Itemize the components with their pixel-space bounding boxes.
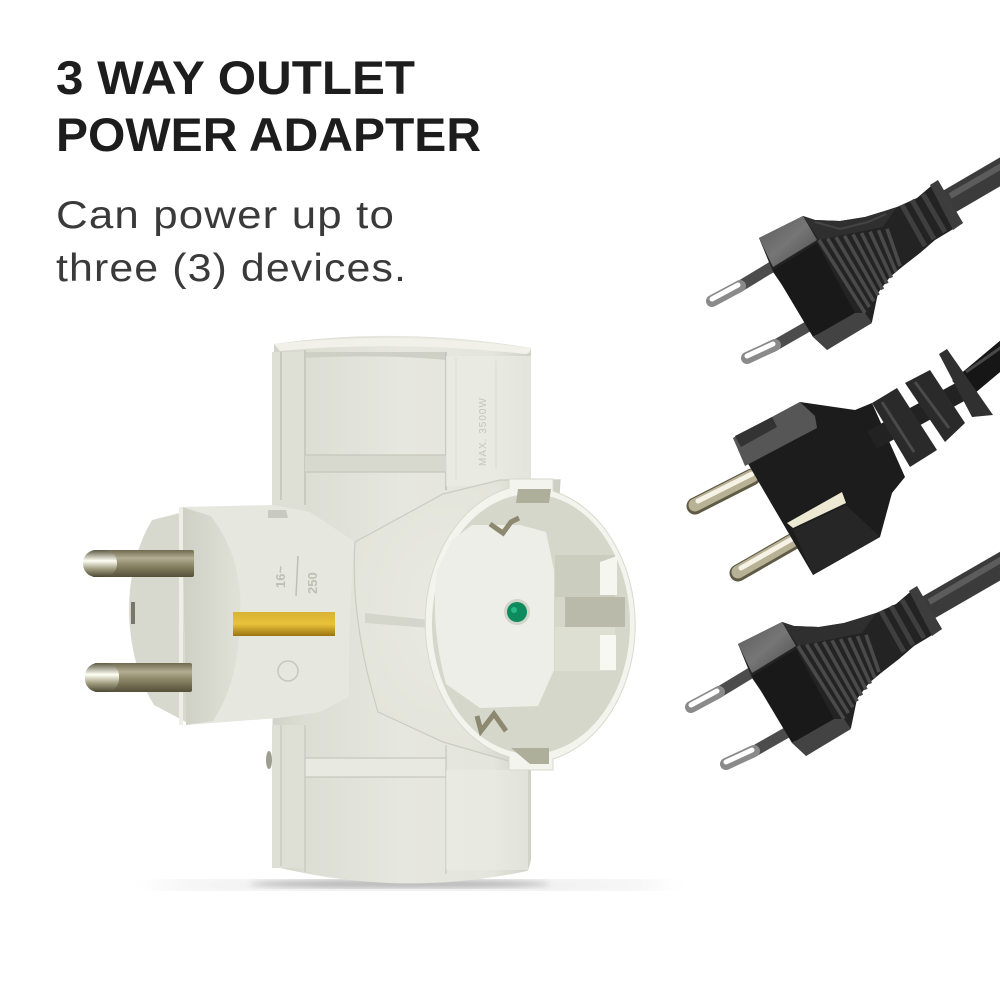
subtitle text: Can power up to [56, 194, 395, 237]
right socket [354, 479, 635, 770]
cord [945, 164, 1000, 204]
title: 3 WAY OUTLET [56, 51, 415, 104]
pins [695, 474, 792, 573]
socket notches [516, 489, 551, 503]
3-way adapter product [83, 336, 635, 883]
left plug [83, 505, 355, 725]
label: max rating moulded text: MAX. 3500W [478, 397, 489, 466]
plug moulded body [759, 181, 963, 350]
earth strip [787, 492, 846, 528]
strain relief [872, 349, 993, 467]
title [56, 51, 481, 161]
plug moulded body [738, 587, 942, 756]
socket center block [435, 525, 554, 708]
plug pins [83, 550, 194, 692]
subtitle text [56, 194, 407, 290]
cord [960, 346, 1000, 390]
cable plug 1: two-pin [712, 164, 1000, 358]
rating marks: 16~ [273, 566, 288, 588]
rating marks [273, 556, 320, 596]
plug brass earth strip [233, 612, 335, 636]
pins [712, 265, 807, 358]
ribs [798, 635, 879, 719]
cable plug 3: two-pin [691, 558, 1000, 764]
adapter vertical body [266, 336, 531, 883]
strain relief collars [902, 194, 945, 246]
socket rim [425, 479, 635, 770]
cord [924, 558, 1000, 610]
strain relief collars [881, 600, 924, 652]
title: POWER ADAPTER [56, 108, 481, 161]
socket ribs [555, 555, 625, 671]
green indicator dot [504, 599, 530, 625]
socket contact springs [477, 518, 519, 731]
rating marks: 250 [305, 572, 320, 594]
pins [691, 671, 786, 764]
adapter floor shadow [150, 880, 670, 890]
ribs [819, 229, 900, 313]
plug moulded body [733, 402, 905, 575]
cable plug 2: earthed [695, 346, 1000, 575]
subtitle text: three (3) devices. [56, 247, 407, 290]
